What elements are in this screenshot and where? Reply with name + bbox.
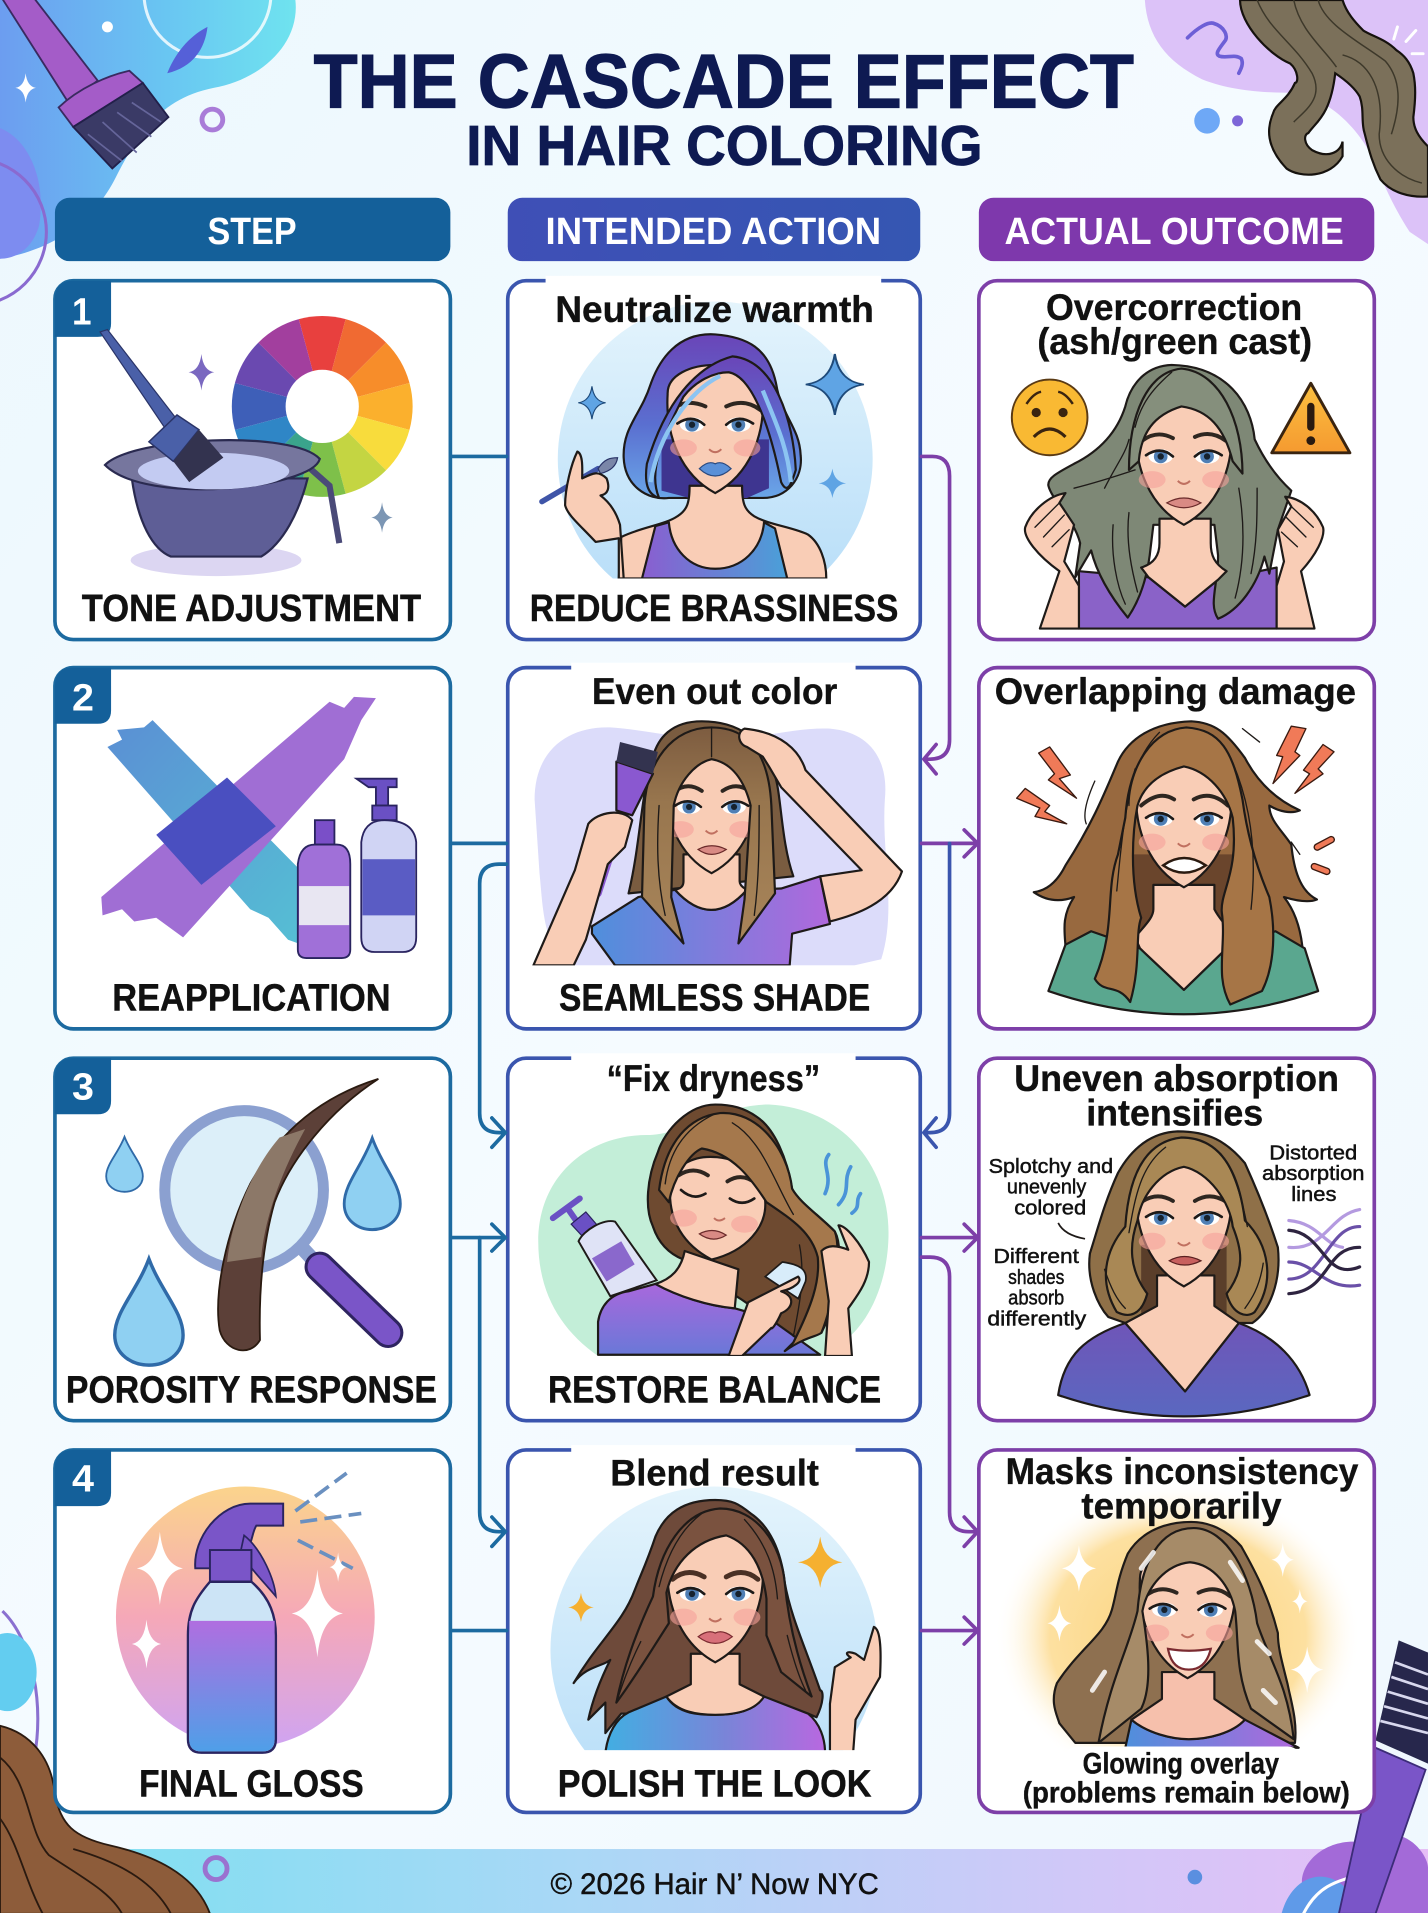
icon: bottle [553,1199,657,1296]
illustration: worried woman with ash green hair [1025,365,1323,629]
illustration: woman with polished brown hair [550,1486,882,1750]
label: POROSITY RESPONSE [66,1369,437,1411]
overlay caption: (problems remain below) [1023,1777,1350,1810]
title: THE CASCADE EFFECT [314,39,1134,124]
icon: mixing bowl and tint brush [100,330,393,576]
decoration: bottom-right blobs and comb [1188,1640,1428,1913]
panel: even out color [508,663,920,1029]
label: SEAMLESS SHADE [559,978,870,1020]
connector: action 3 to outcome 3 [921,1224,978,1251]
note: splotchy: colored [1014,1196,1086,1219]
note: different shades [987,1245,1087,1330]
illustration: woman with blue-violet bob [539,302,873,578]
icon: warning triangle [1272,383,1350,453]
note: distorted lines: lines [1291,1183,1336,1206]
label: RESTORE BALANCE [548,1369,881,1411]
heading [1037,287,1312,362]
decoration: top-right blob and hair [1145,0,1428,244]
panel: overcorrection [979,281,1374,640]
title [314,39,1134,177]
number badge 1 [55,281,111,337]
number badge 3: 3 [72,1067,94,1109]
panel: masks inconsistency [979,1450,1374,1812]
connector: step 1 to action 1 [452,455,507,458]
number badge 3 [55,1058,111,1114]
note: different shades: Different [993,1245,1079,1268]
panel: step 2 reapplication [55,668,450,1029]
heading: “Fix dryness” [607,1058,820,1099]
heading: intensifies [1086,1092,1263,1133]
heading: Blend result [610,1452,819,1493]
icon: spray dashes [295,1473,361,1568]
illustration: woman treating dry hair [538,1105,889,1356]
icon: small purple bottle [298,820,350,958]
number badge 2: 2 [72,677,94,719]
panel: uneven absorption [979,1058,1374,1421]
label: TONE ADJUSTMENT [82,588,421,630]
connector: step 3 to action 3 [452,1224,505,1251]
label: REDUCE BRASSINESS [530,588,898,630]
heading: temporarily [1081,1485,1282,1526]
icon: overlapping paint strokes [101,697,376,946]
icon: spray bottle [188,1504,283,1753]
illustration: distressed woman with wavy brown hair [1034,721,1318,1014]
panel: step 3 porosity response [55,1058,450,1421]
note: splotchy [989,1155,1113,1239]
number badge 1: 1 [72,292,92,334]
panel: overlapping damage [979,668,1374,1029]
connector: action 4 to outcome 4 [921,1617,978,1644]
note: distorted lines [1262,1141,1365,1206]
overlay caption [1023,1747,1350,1810]
icon: large pump bottle [356,779,416,952]
heading: Overcorrection [1046,287,1302,328]
connector: step 3 to blend result [480,1238,505,1546]
heading: Masks inconsistency [1006,1451,1359,1492]
icon: color wheel [232,316,413,497]
heading [1014,1058,1339,1133]
illustration: smiling woman with glowing overlay [1011,1496,1344,1749]
number badge 4 [55,1450,111,1506]
column header: step [55,198,450,261]
panel: step 4 final gloss [55,1450,450,1812]
panel: step 1 tone adjustment [55,281,450,640]
decoration: bottom footer band [0,1849,1428,1913]
panel: blend result [508,1445,920,1814]
icon: gloss circle [116,1487,375,1748]
icons: gold sparkles [568,1537,842,1622]
icon: sad emoji [1012,380,1087,455]
heading: Overlapping damage [995,671,1356,712]
column header: actual outcome [979,198,1374,261]
heading [1006,1451,1359,1526]
panel: neutralize warmth [508,276,920,640]
icons: lightning bolts and damage marks [1017,726,1335,875]
connector: step 2 to action 2 [452,842,507,845]
connector: action 1 feeds even out color [921,456,950,774]
icon: dryness waves [825,1155,860,1213]
icon: distorted absorption lines [1289,1210,1360,1294]
note: different shades: differently [987,1307,1087,1330]
number badge 4: 4 [72,1458,94,1500]
overlay caption: Glowing overlay [1083,1747,1280,1780]
panel: fix dryness [508,1053,920,1421]
heading: Uneven absorption [1014,1058,1339,1099]
note: splotchy: unevenly [1007,1176,1087,1199]
number badge 2 [55,668,111,724]
connector: action 2 to outcome 2 [921,830,978,857]
icons: white sparkles [1047,1543,1323,1693]
illustration: woman brushing straight brown hair [533,721,902,965]
note: distorted lines: absorption [1262,1162,1365,1185]
column header: step: STEP [207,211,297,253]
heading: Even out color [592,671,837,712]
illustration: worried woman with uneven hair color [1058,1131,1310,1416]
label: FINAL GLOSS [139,1764,364,1806]
connector: action 2 back to fix dryness [480,864,507,1147]
decoration: bottom-left hair [0,1611,227,1913]
decoration: top-left blobs and brush [0,0,296,305]
connector: step 4 to action 4 [452,1629,507,1632]
connector: action 2 down to fix dryness [924,843,950,1147]
column header: actual outcome: ACTUAL OUTCOME [1004,211,1344,253]
column header: intended action: INTENDED ACTION [546,211,881,253]
heading: (ash/green cast) [1037,321,1312,362]
icons: sparkles [132,1532,347,1668]
icon: magnifier over hair strand [165,1079,388,1350]
label: REAPPLICATION [112,978,391,1020]
heading: Neutralize warmth [555,289,874,330]
label: POLISH THE LOOK [558,1764,871,1806]
note: different shades: shades [1008,1266,1064,1289]
note: distorted lines: Distorted [1269,1141,1357,1164]
connector: action 3 to outcome 4 [921,1257,978,1546]
title: IN HAIR COLORING [466,114,983,177]
note: different shades: absorb [1008,1287,1064,1310]
note: splotchy: Splotchy and [989,1155,1113,1178]
footer copyright: © 2026 Hair N’ Now NYC [550,1868,879,1901]
column header: intended action [508,198,920,261]
icon: water drops [106,1137,400,1365]
